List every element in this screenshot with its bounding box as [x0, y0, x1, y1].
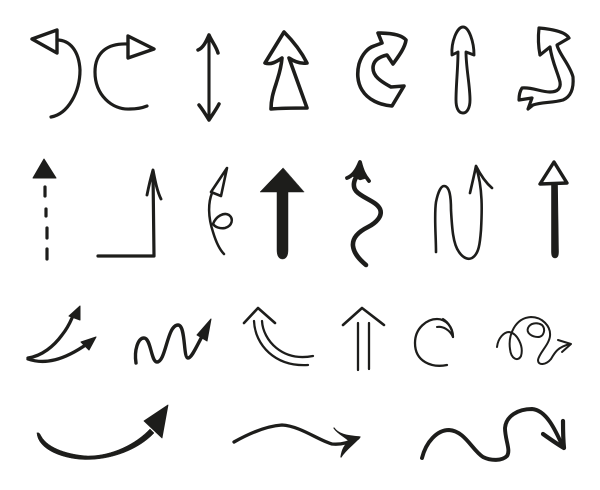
arrow: long curved sweep with solid head	[37, 405, 168, 460]
arrow: circular C arrow	[415, 319, 453, 366]
arrow: curved left with outline triangle head	[32, 30, 80, 117]
arrow: outline wavy down-left arrow	[519, 28, 573, 109]
arrow: double-headed vertical	[198, 35, 219, 120]
arrow: double-line straight with chevron head	[343, 308, 384, 370]
arrow: bold solid up arrow	[260, 168, 304, 259]
arrow: outline curved C arrow	[358, 33, 406, 106]
arrow: squiggle up-right	[135, 319, 211, 363]
arrow: double branching arrows	[28, 306, 96, 361]
arrow: dashed with solid triangle head	[33, 159, 56, 259]
arrow: gentle wave right	[234, 425, 360, 457]
arrow: looped with outline narrow head	[209, 168, 232, 254]
arrow: thick wavy up arrow	[347, 161, 381, 265]
arrow: outline slim up arrow	[452, 27, 474, 113]
arrow: U-turn up arrow	[435, 166, 492, 259]
arrow: curved right with outline triangle head	[95, 36, 154, 109]
arrow: outline triangle head on thick stem	[540, 162, 567, 258]
arrow: scribbled loop arrow	[497, 317, 571, 364]
arrow: double-line curved with chevron head	[244, 308, 313, 365]
arrow: large outline up arrow	[265, 32, 307, 109]
arrow: long wavy with open head	[422, 409, 564, 460]
arrow: right-angle elbow	[98, 170, 161, 256]
